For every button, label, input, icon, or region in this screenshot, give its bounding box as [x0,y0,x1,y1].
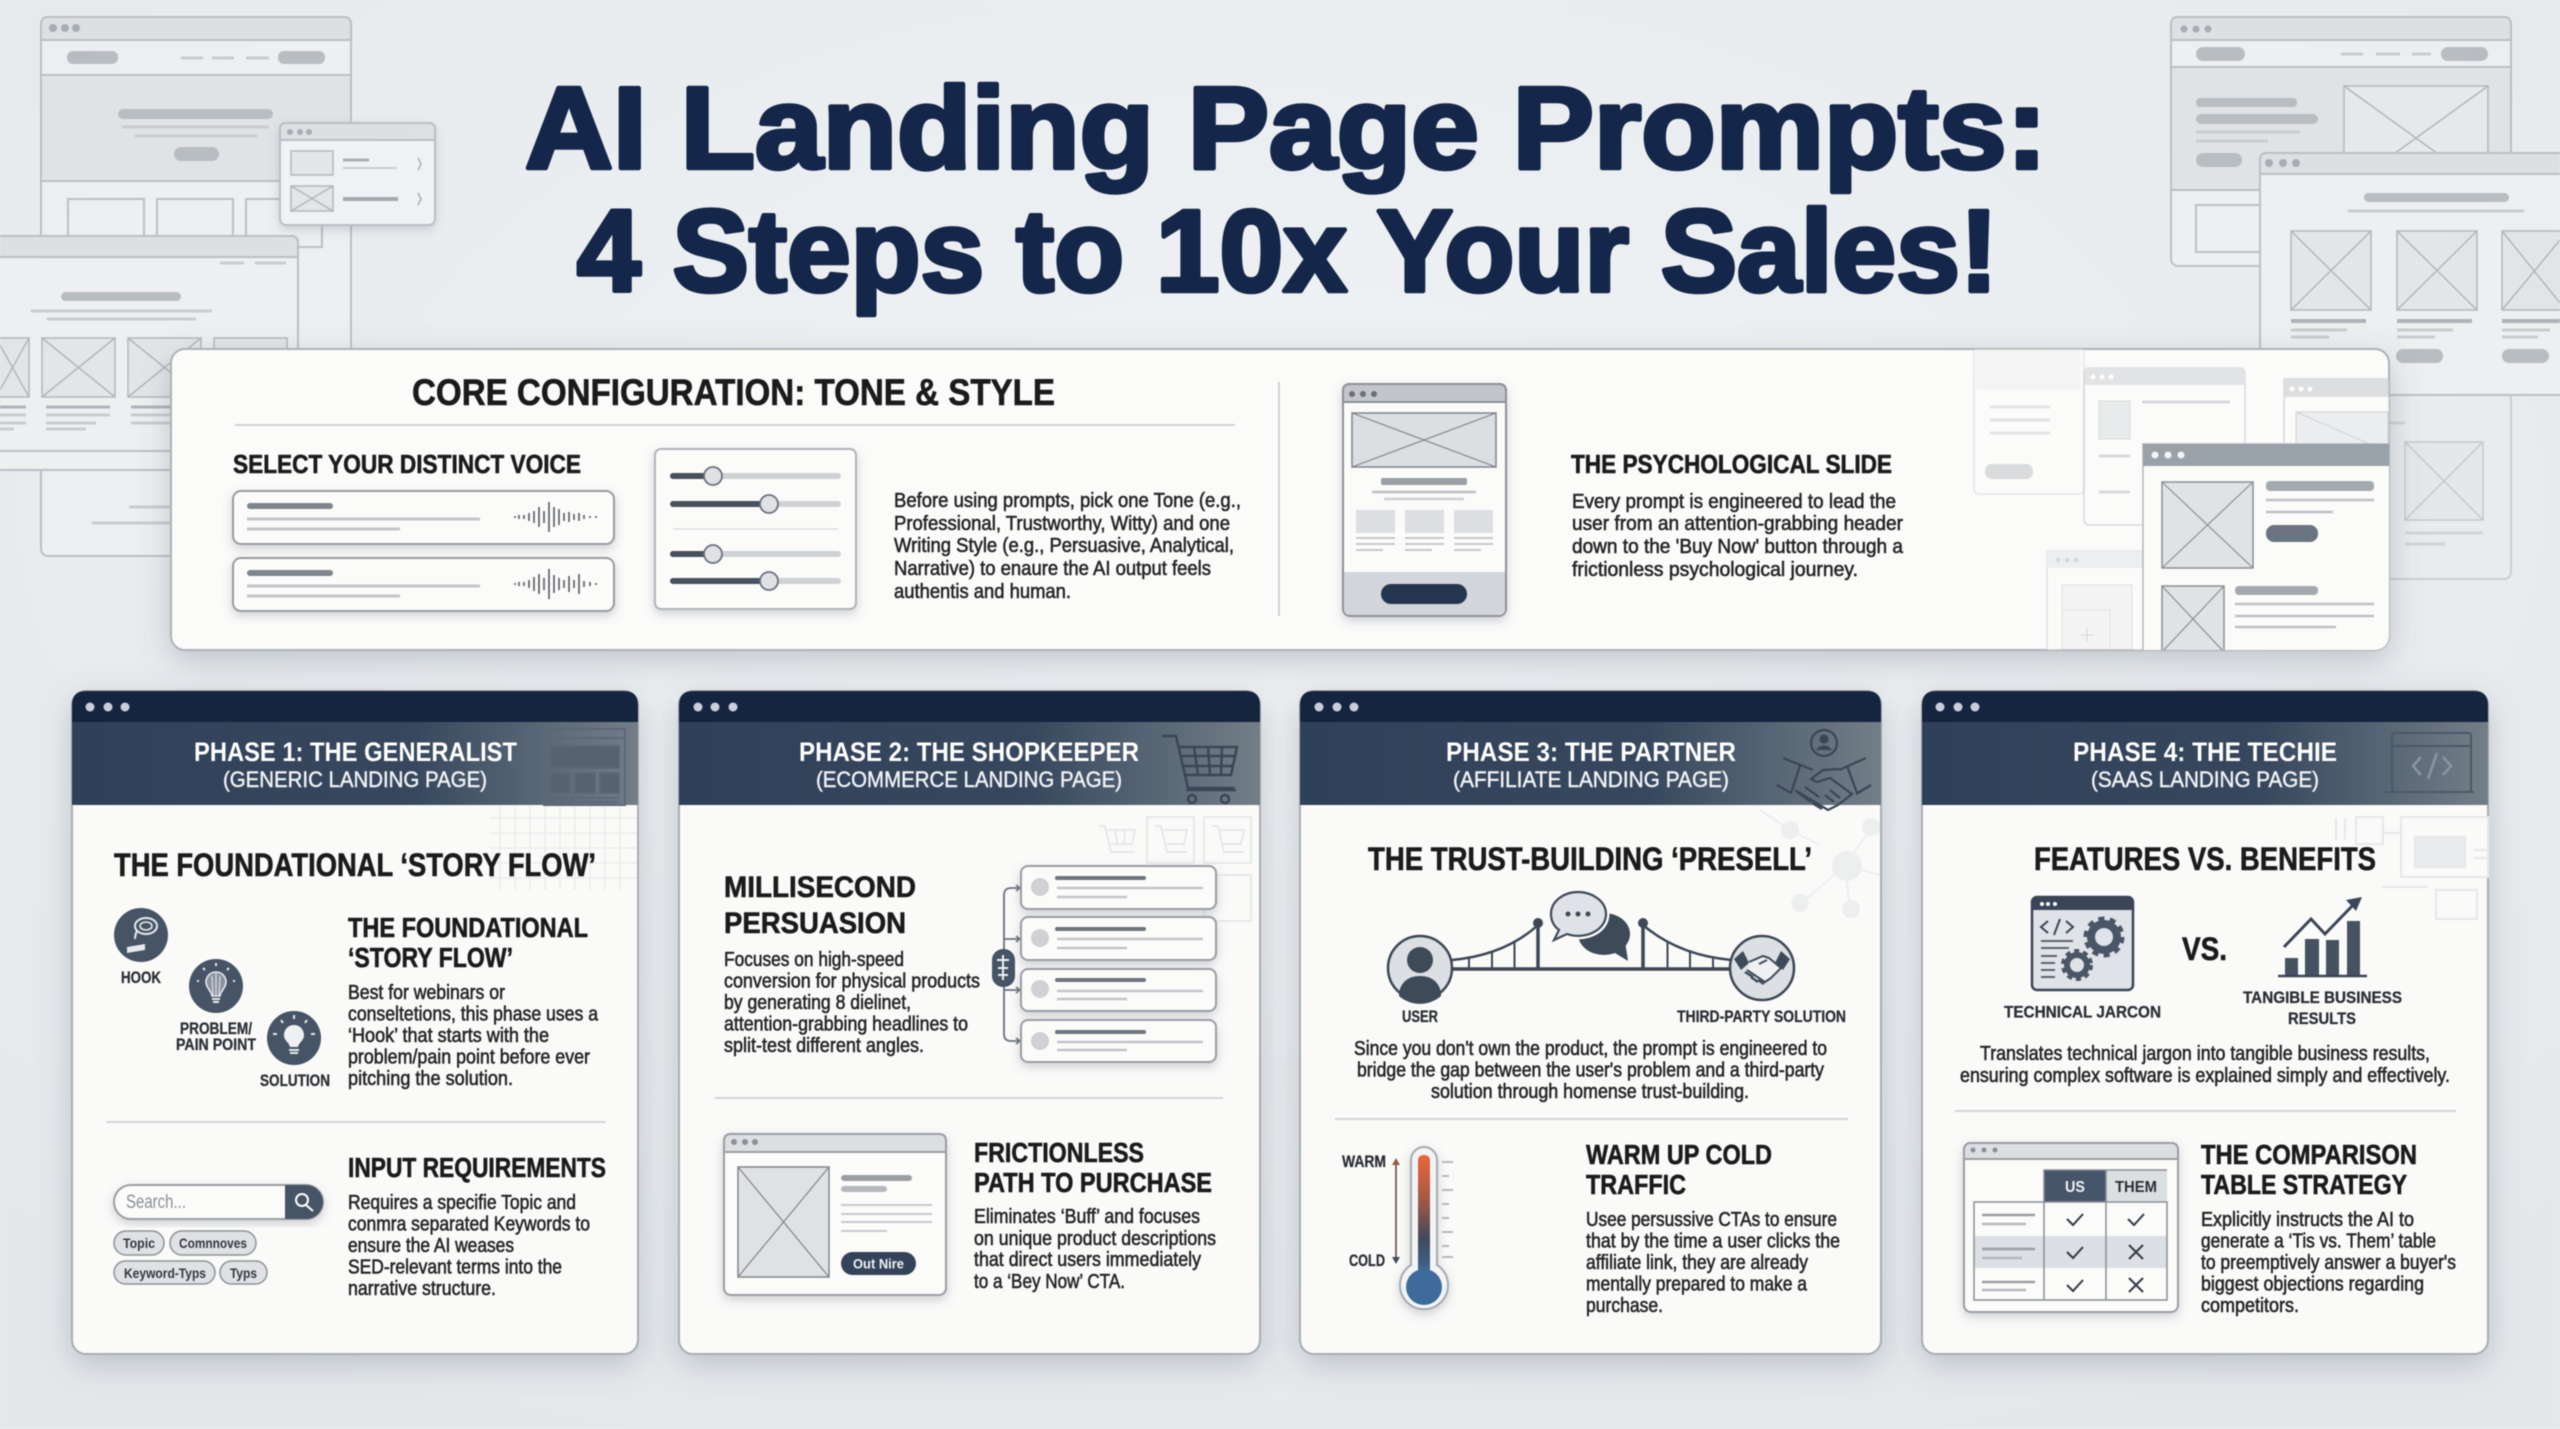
icon: thermometer: COLD [1349,1251,1385,1270]
heading: trust building presell: THE TRUST-BUILDING ‘PRESELL’ [1368,841,1812,877]
text: warm up cold traffic: that by the time a user clicks the [1586,1230,1840,1252]
text: comparison table strategy [2201,1139,2456,1317]
icon: technical jargon [2004,897,2161,1022]
text: warm up cold traffic: purchase. [1586,1294,1663,1317]
text: frictionless path [974,1137,1216,1293]
text: pick one tone: Narrative) to enaure the AI output feels [894,557,1211,580]
text: foundational story flow: pitching the solution. [348,1067,513,1090]
text: features description [1960,1042,2450,1087]
icon: solution: SOLUTION [260,1071,330,1090]
diagram: bridge: USER [1402,1007,1438,1026]
text: features description: Translates technical jargon into tangible business results, [1980,1042,2430,1065]
wireframe: small popup card [280,123,435,225]
wireframe: large landing page left [41,17,351,556]
text: bridge description [1354,1037,1827,1103]
search bar and chips: Comnnoves [179,1235,247,1251]
text: pick one tone: Writing Style (e.g., Persuasive, Analytical, [894,534,1234,557]
icon: problem: PROBLEM/ [180,1019,252,1038]
wireframe: overlapping page left [0,236,298,470]
search bar and chips [114,1185,323,1284]
text: foundational story flow [348,912,599,1090]
phase 4 header: (SAAS LANDING PAGE) [2091,767,2319,792]
icon: code window [2384,733,2474,792]
search bar and chips: Keyword-Typs [124,1265,206,1281]
text: millisecond persuasion: conversion for physical products [724,970,980,992]
phase 4 header: PHASE 4: THE TECHIE [2073,737,2337,767]
text: pick one tone [894,489,1241,603]
text: bridge description: bridge the gap between the user's problem and a third-party [1357,1058,1825,1082]
wireframe: overlapping page right [2260,153,2560,395]
background wireframes: left [0,17,435,556]
text: input requirements: Requires a specifie Topic and [348,1191,576,1214]
text: frictionless path: on unique product descriptions [974,1227,1216,1250]
wireframe: lower panel behind core [2340,390,2511,579]
diagram: bridge [1388,892,1846,1026]
text: comparison table strategy: Explicitly instructs the AI to [2201,1208,2414,1231]
text: input requirements [348,1152,606,1300]
text: input requirements: ensure the AI weases [348,1234,514,1257]
text: warm up cold traffic: WARM UP COLD [1586,1139,1772,1170]
phase 4 header [1922,691,2488,805]
icon: tangible results chart [2243,897,2402,1028]
icon: tangible results chart: TANGIBLE BUSINESS [2243,988,2402,1007]
text: input requirements: SED-relevant terms into the [348,1256,562,1278]
panel: phase 4 [1922,691,2488,1354]
text: millisecond persuasion: by generating 8 dielinet, [724,991,911,1014]
phase 1 header [72,691,638,805]
text: pick one tone: Before using prompts, pick one Tone (e.g., [894,489,1241,512]
text: pick one tone: Professional, Trustworthy, Witty) and one [894,512,1230,535]
text: frictionless path: that direct users immediately [974,1248,1202,1271]
title [525,63,2047,316]
text: the psychological slide: user from an attention-grabbing header [1572,512,1903,535]
text: comparison table strategy: biggest objections regarding [2201,1272,2424,1296]
phase 3 header [1300,691,1881,805]
search bar and chips: Search... [126,1192,186,1213]
text: millisecond persuasion: PERSUASION [724,907,906,940]
text: foundational story flow: conseltetions, this phase uses a [348,1002,599,1026]
faint network decoration [1760,810,1880,917]
text: vs: VS. [2182,931,2227,967]
headline variant cards [992,866,1216,1062]
panel: phase 1 [72,691,638,1354]
faint cart decorations [1099,817,1251,921]
text: comparison table strategy: generate a ‘Tis vs. Them’ table [2201,1230,2436,1252]
heading: foundational story flow: THE FOUNDATIONAL ‘STORY FLOW’ [114,847,596,883]
text: millisecond persuasion: MILLISECOND [724,871,916,904]
voice card 1 [233,491,614,544]
icon: thermometer: WARM [1342,1152,1386,1171]
text: bridge description: solution through homense trust-building. [1431,1080,1749,1103]
phone wireframe [1343,384,1506,616]
text: millisecond persuasion: split-test different angles. [724,1034,924,1057]
phase 3 header: PHASE 3: THE PARTNER [1446,737,1736,767]
search bar and chips: Typs [230,1265,257,1281]
text: features description: ensuring complex software is explained simply and effectively. [1960,1064,2450,1087]
text: warm up cold traffic: mentally prepared to make a [1586,1272,1808,1296]
text: warm up cold traffic: TRAFFIC [1586,1169,1686,1200]
panel: core configuration [171,345,2394,656]
phase 3 header: (AFFILIATE LANDING PAGE) [1453,767,1729,792]
icon: tangible results chart: RESULTS [2288,1009,2356,1028]
panel: phase 2 [679,691,1260,1354]
text: input requirements: conmra separated Keywords to [348,1212,590,1236]
text: bridge description: Since you don't own the product, the prompt is engineered to [1354,1037,1827,1060]
icon: hook [114,908,168,987]
text: comparison table strategy: competitors. [2201,1294,2299,1317]
icon: thermometer [1342,1147,1453,1309]
icon: handshake in header [1777,730,1871,810]
icon: problem [176,959,257,1054]
comparison table [1964,1143,2178,1312]
background wireframes: right [2171,17,2560,579]
text: foundational story flow: Best for webinars or [348,981,505,1004]
text: foundational story flow: problem/pain point before ever [348,1046,590,1068]
diagram: bridge: THIRD-PARTY SOLUTION [1677,1007,1846,1026]
faint decoration [2336,817,2488,919]
search bar and chips: Topic [123,1235,155,1251]
product page wireframe [724,1134,946,1295]
text: the psychological slide: frictionless psychological journey. [1572,558,1858,581]
text: comparison table strategy: THE COMPARISON [2201,1139,2417,1170]
phase 2 header: PHASE 2: THE SHOPKEEPER [799,737,1139,767]
comparison table: THEM [2115,1179,2157,1196]
slider card [655,449,856,609]
comparison table: US [2065,1179,2085,1196]
text: foundational story flow: ‘Hook’ that starts with the [348,1024,549,1047]
text: the psychological slide [1571,449,1904,581]
heading: core configuration: CORE CONFIGURATION: TONE & STYLE [412,372,1055,413]
text: pick one tone: authentis and human. [894,580,1071,603]
text: warm up cold traffic [1586,1139,1840,1317]
text: warm up cold traffic: affiliate link, they are already [1586,1251,1809,1274]
icon: technical jargon: TECHNICAL JARCON [2004,1002,2161,1022]
text: the psychological slide: THE PSYCHOLOGICAL SLIDE [1571,449,1892,479]
text: comparison table strategy: to preemptively answer a buyer's [2201,1251,2456,1274]
product page wireframe: Out Nire [853,1256,904,1272]
voice card 2 [233,558,614,611]
core panel decorative wireframes [1974,345,2394,656]
text: foundational story flow: ‘STORY FLOW’ [348,942,513,973]
text: foundational story flow: THE FOUNDATIONAL [348,912,588,943]
text: frictionless path: PATH TO PURCHASE [974,1167,1212,1198]
icon: problem: PAIN POINT [176,1035,257,1054]
text: comparison table strategy: TABLE STRATEGY [2201,1169,2407,1200]
text: frictionless path: FRICTIONLESS [974,1137,1144,1168]
title: 4 Steps to 10x Your Sales! [577,186,1998,316]
wireframe: large landing page right [2171,17,2511,266]
text: the psychological slide: down to the 'Buy Now' button through a [1572,535,1904,558]
text: millisecond persuasion: attention-grabbing headlines to [724,1012,968,1036]
heading: features vs benefits: FEATURES VS. BENEFITS [2034,841,2376,877]
phase 1 header: (GENERIC LANDING PAGE) [223,767,487,792]
panel: phase 3 [1300,691,1881,1354]
heading: select your distinct voice: SELECT YOUR DISTINCT VOICE [233,449,581,479]
text: the psychological slide: Every prompt is engineered to lead the [1572,490,1896,513]
text: frictionless path: to a ‘Bey Now’ CTA. [974,1270,1125,1293]
icon: solution [260,1011,330,1090]
text: warm up cold traffic: Usee persussive CTAs to ensure [1586,1208,1837,1231]
icon: hook: HOOK [121,968,162,987]
phase 2 header [679,691,1260,805]
icon: user [1388,936,1452,1004]
icon: cart [1162,736,1237,803]
title: AI Landing Page Prompts: [525,63,2047,193]
text: input requirements: narrative structure. [348,1277,496,1300]
icon: chat bubbles [1551,892,1630,961]
icon: handshake [1730,936,1794,1000]
text: millisecond persuasion: Focuses on high-speed [724,948,904,971]
phase 1 header: PHASE 1: THE GENERALIST [194,737,517,767]
phase 2 header: (ECOMMERCE LANDING PAGE) [816,767,1122,792]
grid decoration [490,806,637,890]
text: millisecond persuasion [724,871,980,1057]
text: input requirements: INPUT REQUIREMENTS [348,1152,606,1183]
text: frictionless path: Eliminates ‘Buff’ and focuses [974,1205,1200,1228]
